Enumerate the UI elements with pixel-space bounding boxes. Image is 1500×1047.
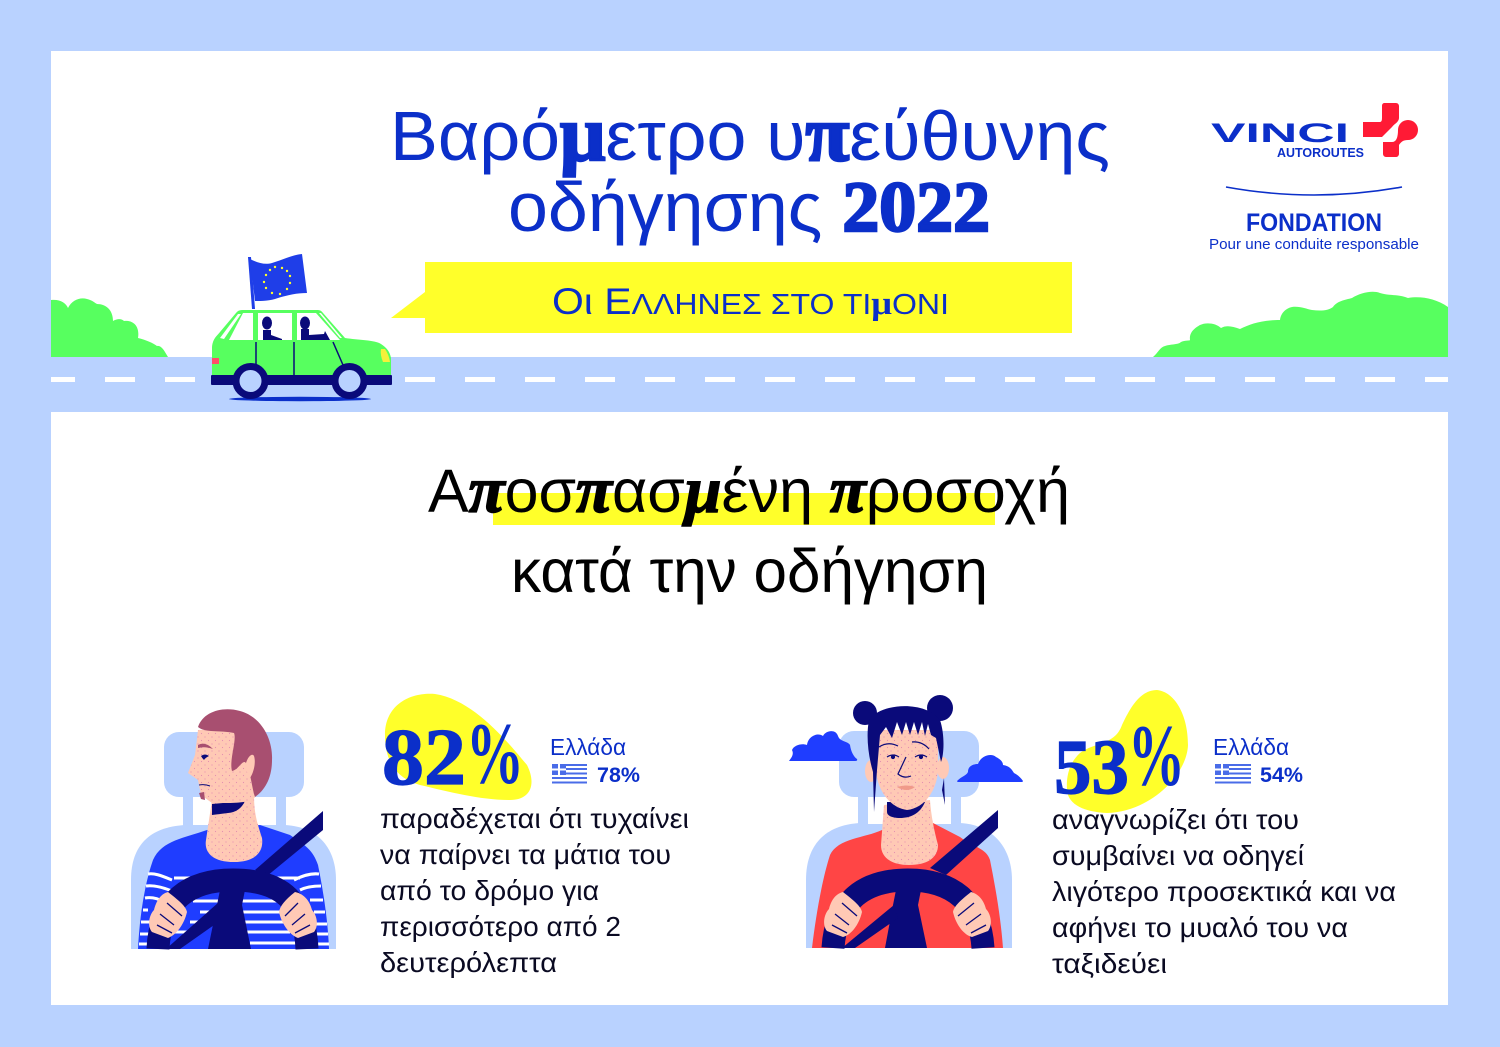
striped shirt bbox=[138, 825, 329, 949]
steering wheel bbox=[158, 880, 307, 949]
face bbox=[188, 728, 258, 803]
icon: Greek flag bbox=[1215, 764, 1251, 784]
hair bbox=[853, 695, 953, 812]
stat: 82%: 82 bbox=[382, 714, 466, 802]
stat: 82%: % bbox=[466, 706, 524, 803]
heading bbox=[428, 454, 1070, 605]
road bbox=[51, 357, 1448, 412]
neck bbox=[881, 800, 938, 865]
Greece comparison 54%: Ελλάδα bbox=[1213, 734, 1289, 760]
text: 82% description: να παίρνει τα μάτια του bbox=[380, 839, 671, 870]
text: 53% description: αφήνει το μυαλό του να bbox=[1052, 912, 1348, 943]
seat belt bbox=[255, 811, 323, 876]
text: 53% description: λιγότερο προσεκτικά και να bbox=[1052, 876, 1396, 907]
hair bbox=[198, 709, 272, 797]
logo: VINCI Autoroutes Fondation: FONDATION bbox=[1246, 209, 1382, 237]
stat: 53%: 53 bbox=[1054, 723, 1129, 810]
heading: κατά την οδήγηση bbox=[511, 537, 988, 605]
logo red cross bbox=[1363, 103, 1418, 157]
car door lines bbox=[256, 342, 343, 375]
text: 82% description bbox=[380, 803, 689, 978]
panel: header bbox=[51, 51, 1448, 357]
text: 53% description: αναγνωρίζει ότι του bbox=[1052, 804, 1299, 835]
text: 82% description: παραδέχεται ότι τυχαίνει bbox=[380, 803, 689, 834]
car shadow bbox=[229, 397, 371, 401]
seat bbox=[806, 731, 1012, 948]
facial features bbox=[879, 742, 929, 790]
car wheels bbox=[236, 366, 364, 396]
face bbox=[876, 730, 938, 810]
ear bbox=[245, 755, 255, 778]
Greece comparison 54% bbox=[1213, 734, 1303, 787]
left hand bbox=[824, 892, 862, 937]
stat: 82% bbox=[382, 694, 532, 803]
title: οδήγησης 2022 bbox=[508, 167, 990, 247]
illustration: female driver bbox=[789, 695, 1023, 948]
EU flag bbox=[248, 254, 307, 309]
neck bbox=[206, 795, 262, 862]
subtitle banner bbox=[391, 262, 1072, 333]
white gap behind neck bbox=[868, 797, 951, 824]
car lights bbox=[212, 358, 219, 364]
panel: distracted driving bbox=[51, 412, 1448, 1005]
logo: VINCI Autoroutes Fondation: Pour une conduite responsable bbox=[1209, 236, 1419, 253]
logo: VINCI Autoroutes Fondation bbox=[1209, 103, 1419, 253]
icon: Greek flag bbox=[552, 764, 587, 784]
seat belt bbox=[930, 810, 998, 875]
clouds bbox=[789, 731, 1023, 782]
text: 82% description: δευτερόλεπτα bbox=[380, 947, 557, 978]
icon: car with EU flag bbox=[211, 254, 392, 401]
right hand bbox=[279, 892, 317, 938]
car windows bbox=[220, 313, 342, 340]
stat: 53%: % bbox=[1128, 708, 1185, 805]
text: 82% description: από το δρόμο για bbox=[380, 875, 599, 906]
red top bbox=[812, 823, 1003, 948]
subtitle banner: Οι Ε ΛΛΗΝΕΣ ΣΤΟ ΤΙ μΟΝΙ bbox=[552, 281, 949, 322]
logo: VINCI Autoroutes Fondation: AUTOROUTES bbox=[1277, 146, 1364, 160]
title: Βαρόμετρο υπεύθυνης bbox=[390, 90, 1110, 177]
Greece comparison 78%: 78% bbox=[597, 764, 640, 787]
logo wordmark: VINCI bbox=[1211, 118, 1349, 148]
heading: Αποσπασμένη προσοχή bbox=[428, 454, 1070, 527]
car passengers bbox=[262, 316, 330, 340]
left hand bbox=[149, 892, 187, 938]
stat: 53% bbox=[1054, 690, 1188, 813]
yellow blob bbox=[385, 694, 532, 800]
ears bbox=[865, 760, 877, 782]
seat bbox=[131, 732, 336, 949]
text: 53% description: συμβαίνει να οδηγεί bbox=[1052, 840, 1304, 871]
text: 82% description: περισσότερο από 2 bbox=[380, 911, 621, 942]
text: 53% description bbox=[1052, 804, 1396, 979]
car sill bbox=[211, 375, 392, 385]
eye and brow bbox=[198, 744, 213, 800]
right hand bbox=[953, 892, 991, 937]
Greece comparison 54%: 54% bbox=[1260, 764, 1303, 787]
right bush bbox=[1153, 292, 1448, 357]
text: 53% description: ταξιδεύει bbox=[1052, 948, 1167, 979]
left bush bbox=[51, 298, 168, 357]
car body bbox=[212, 310, 391, 376]
Greece comparison 78%: Ελλάδα bbox=[550, 734, 626, 760]
illustration: male driver bbox=[131, 709, 336, 949]
collar shadow bbox=[887, 802, 925, 818]
heading highlight bbox=[493, 493, 995, 525]
title bbox=[390, 90, 1110, 247]
steering wheel bbox=[833, 880, 983, 948]
Greece comparison 78% bbox=[550, 734, 640, 787]
yellow blob bbox=[1067, 690, 1188, 813]
collar shadow bbox=[212, 801, 245, 815]
